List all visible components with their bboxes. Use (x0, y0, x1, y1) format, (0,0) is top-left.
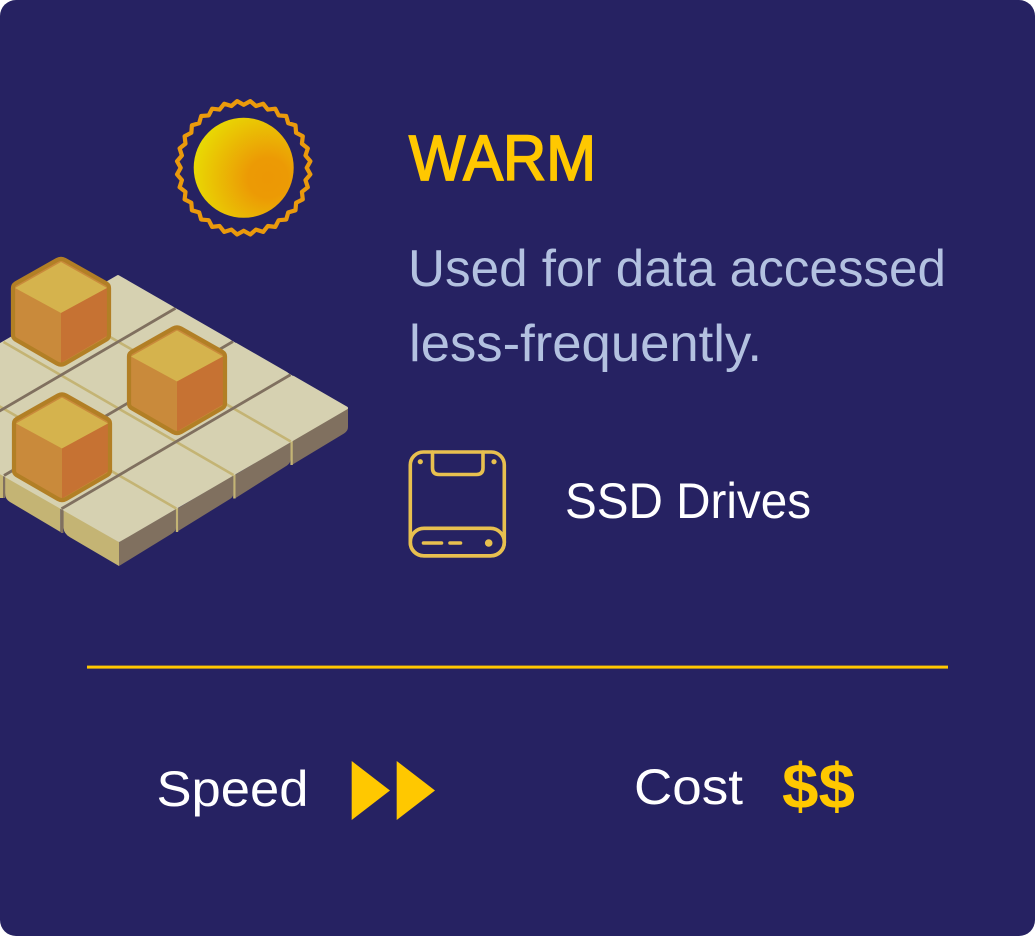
tile left side faces (0, 473, 119, 566)
tile right side gaps (176, 441, 293, 532)
illustration: isometric tile grid with cubes (0, 259, 348, 566)
icon: SSD drive (410, 452, 504, 556)
tile right side faces (119, 408, 348, 566)
cost indicator: two dollar signs: $$ (782, 750, 855, 822)
tile tops (0, 276, 346, 540)
text: description: less-frequently. (409, 315, 762, 373)
label: Speed: Speed (156, 761, 308, 817)
label: SSD Drives: SSD Drives (565, 473, 811, 529)
cube: back left (13, 259, 109, 365)
tile seams, down-right (0, 308, 291, 508)
label: Cost: Cost (634, 759, 743, 815)
cube: centre right (129, 327, 225, 433)
icon: speed double arrow (352, 761, 435, 820)
icon: sun (177, 101, 310, 234)
text: description: Used for data accessed (408, 240, 946, 298)
notches on back edge (172, 305, 294, 376)
tile left side gaps (3, 474, 63, 533)
tile seams, up-right (0, 308, 290, 509)
text: description (408, 240, 946, 373)
cube: front left (14, 394, 110, 500)
divider (87, 666, 948, 669)
heading: WARM: WARM (409, 122, 596, 194)
